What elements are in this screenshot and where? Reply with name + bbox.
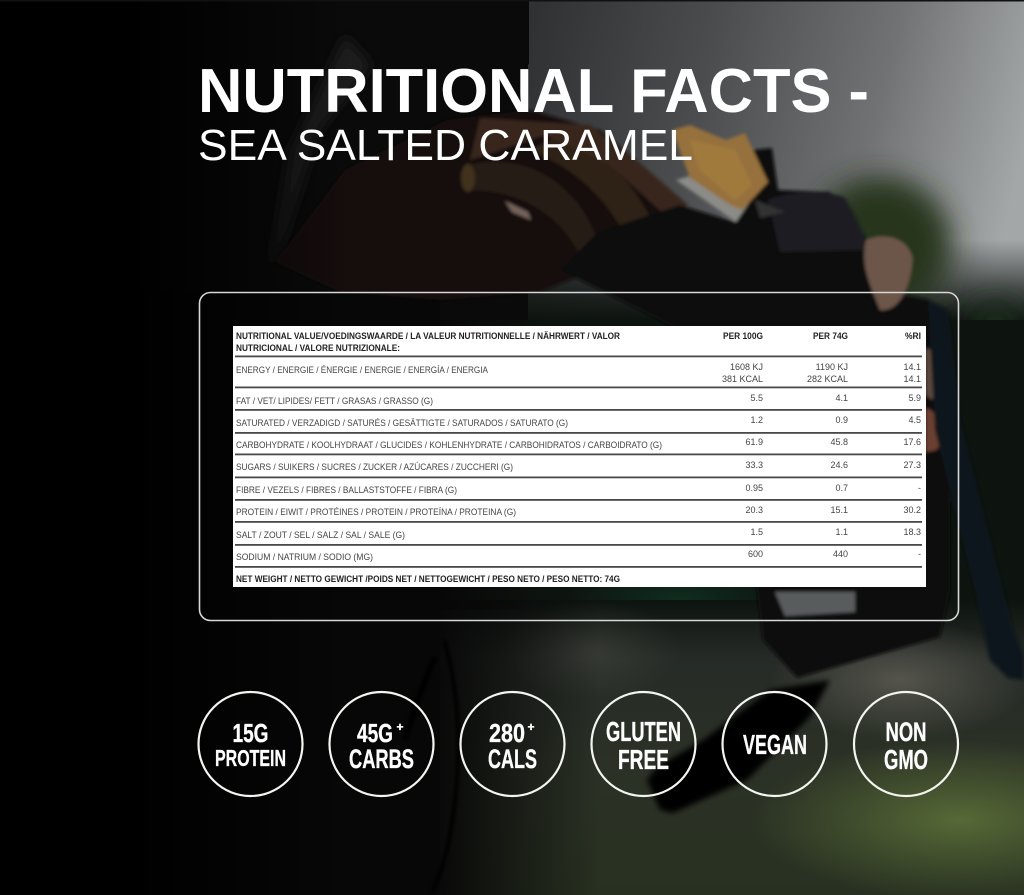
- row: sugars: SUGARS / SUIKERS / SUCRES / ZUCKER / AZÚCARES / ZUCCHERI (G): [236, 462, 513, 472]
- row: salt: [236, 527, 921, 540]
- row: fibre: [236, 483, 921, 495]
- badge: 45g+ carbs: +: [396, 720, 404, 734]
- table header: NUTRICIONAL / VALORE NUTRIZIONALE:: [236, 343, 400, 353]
- badge: non gmo: GMO: [884, 744, 928, 775]
- badge: 280+ cals: +: [527, 720, 535, 734]
- row: sugars: 27.3: [903, 460, 921, 470]
- row: fat: [236, 393, 921, 406]
- fingers on the bottle: [864, 236, 913, 310]
- badge: vegan: [722, 692, 826, 796]
- row: fat: FAT / VET/ LIPIDES/ FETT / GRASAS / GRASSO (G): [236, 396, 433, 406]
- badge: 45g+ carbs: 45G: [357, 718, 393, 748]
- row: energy: 14.1: [903, 362, 921, 372]
- panel: nutrition table: [233, 326, 926, 587]
- table header: PER 100G: [723, 331, 763, 341]
- badge: non gmo: NON: [886, 717, 926, 747]
- ground: [430, 600, 1024, 895]
- row: energy: 381 KCAL: [722, 374, 763, 384]
- row: saturated: 1.2: [750, 415, 763, 425]
- row: carbohydrate: 17.6: [903, 437, 921, 447]
- dark jacket sleeve: [130, 0, 529, 520]
- background trees: [808, 177, 1023, 370]
- bar wrapper: [676, 176, 752, 222]
- row: fat: 5.5: [750, 393, 763, 403]
- row: fat: 4.1: [835, 393, 848, 403]
- row: sugars: 33.3: [745, 460, 763, 470]
- row: net weight: NET WEIGHT / NETTO GEWICHT /POIDS NET / NETTOGEWICHT / PESO NETO / PESO NETTO: 74G: [236, 574, 620, 584]
- badge: 45g+ carbs: [330, 692, 434, 796]
- table header: %RI: [905, 331, 921, 341]
- cables: [405, 657, 435, 740]
- badge: 280+ cals: [460, 692, 564, 796]
- row: energy: 1608 KJ: [730, 362, 763, 372]
- strap: [647, 680, 830, 813]
- subheading: flavour: SEA SALTED CARAMEL: [198, 121, 693, 170]
- badge: 15g protein: 15G: [232, 718, 268, 748]
- badge: gluten free: GLUTEN: [606, 716, 681, 747]
- caramel bar: [672, 125, 768, 210]
- bottle: [560, 148, 950, 678]
- row: carbohydrate: 45.8: [830, 437, 848, 447]
- row: carbohydrate: CARBOHYDRATE / KOOLHYDRAAT / GLUCIDES / KOHLENHYDRATE / CARBOHIDRATOS / CARBOIDRATO (G): [236, 440, 662, 450]
- handlebar lever: [928, 300, 1024, 680]
- row: protein: [236, 505, 921, 517]
- badge: 280+ cals: CALS: [488, 744, 537, 774]
- row: protein: 20.3: [745, 505, 763, 515]
- badge: 280+ cals: 280: [489, 718, 525, 748]
- row: fibre: FIBRE / VEZELS / FIBRES / BALLASTSTOFFE / FIBRA (G): [236, 485, 457, 495]
- badge: 45g+ carbs: CARBS: [349, 744, 414, 774]
- table header: [236, 331, 921, 353]
- row: fat: 5.9: [908, 393, 921, 403]
- title: [198, 57, 869, 170]
- row: sugars: [236, 460, 921, 472]
- row: salt: SALT / ZOUT / SEL / SALZ / SAL / SALE (G): [236, 530, 405, 540]
- table header: NUTRITIONAL VALUE/VOEDINGSWAARDE / LA VALEUR NUTRITIONNELLE / NÄHRWERT / VALOR: [236, 331, 620, 341]
- row: energy: 282 KCAL: [807, 374, 848, 384]
- row: salt: 1.5: [750, 527, 763, 537]
- row: carbohydrate: [236, 437, 921, 450]
- sky: [528, 0, 1024, 320]
- row: sodium: 600: [748, 549, 763, 559]
- row: protein: PROTEIN / EIWIT / PROTÉINES / PROTEIN / PROTEÍNA / PROTEINA (G): [236, 507, 516, 517]
- heading: nutritional facts: NUTRITIONAL FACTS -: [198, 57, 869, 126]
- row: salt: 18.3: [903, 527, 921, 537]
- row: energy: ENERGY / ENERGIE / ÉNERGIE / ENERGIE / ENERGÍA / ENERGIA: [236, 365, 488, 375]
- row: protein: 30.2: [903, 505, 921, 515]
- row: fibre: 0.95: [745, 483, 763, 493]
- row: energy: 1190 KJ: [816, 362, 848, 372]
- row: sugars: 24.6: [830, 460, 848, 470]
- row: energy: 14.1: [903, 374, 921, 384]
- row: saturated: [236, 415, 921, 428]
- row: fibre: 0.7: [835, 483, 848, 493]
- badge: vegan: VEGAN: [743, 729, 807, 760]
- badge: gluten free: [592, 692, 696, 796]
- hand and fingers: [275, 110, 688, 300]
- row: saturated: SATURATED / VERZADIGD / SATURÉS / GESÄTTIGTE / SATURADOS / SATURATO (G): [236, 418, 568, 428]
- badge: 15g protein: PROTEIN: [215, 745, 286, 771]
- row: sodium: SODIUM / NATRIUM / SODIO (MG): [236, 552, 373, 562]
- badge: non gmo: [854, 692, 958, 796]
- row: saturated: 4.5: [908, 415, 921, 425]
- badge: gluten free: FREE: [618, 744, 669, 775]
- row: saturated: 0.9: [835, 415, 848, 425]
- row: salt: 1.1: [835, 527, 848, 537]
- row: sodium: -: [918, 549, 921, 559]
- row: sodium: [236, 549, 921, 562]
- row: energy: [236, 362, 921, 384]
- badge: 15g protein: [198, 692, 302, 796]
- row: protein: 15.1: [830, 505, 848, 515]
- row: fibre: -: [918, 483, 921, 493]
- row: carbohydrate: 61.9: [745, 437, 763, 447]
- panel: rounded frame around nutrition table: [200, 292, 958, 620]
- table header: PER 74G: [813, 331, 848, 341]
- row: sodium: 440: [833, 549, 848, 559]
